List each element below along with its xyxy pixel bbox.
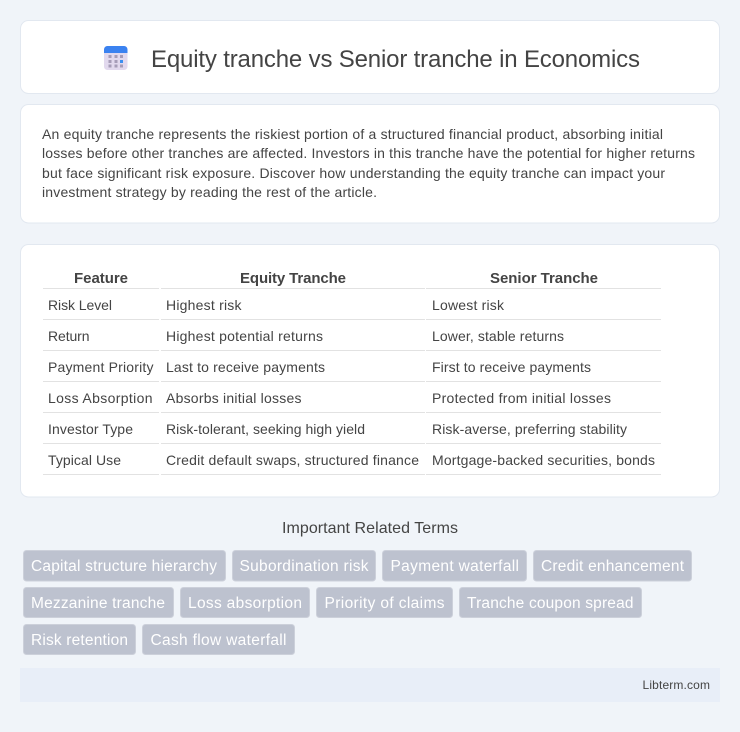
row: payment priority: First to receive payments (432, 359, 591, 375)
table header row: Feature (74, 270, 128, 287)
icon: calendar (104, 46, 128, 70)
row: return: Lower, stable returns (432, 328, 564, 344)
tag: Payment waterfall (390, 558, 519, 575)
row: return: Highest potential returns (166, 328, 323, 344)
tag (316, 588, 452, 618)
tag: Priority of claims (324, 595, 445, 612)
row: risk level: Lowest risk (432, 297, 505, 313)
intro text: losses before other tranches are affected. Investors in this tranche have the potential for higher returns (42, 145, 695, 161)
row: payment priority (43, 359, 661, 382)
tag: Mezzanine tranche (31, 595, 165, 612)
row: typical use: Mortgage-backed securities, bonds (432, 452, 655, 468)
row: typical use (43, 452, 661, 475)
tag: Risk retention (31, 632, 128, 649)
tag: Tranche coupon spread (467, 595, 634, 612)
header panel (20, 20, 720, 94)
tag (180, 588, 310, 618)
row: investor type (43, 421, 661, 444)
row: risk level: Risk Level (48, 297, 112, 313)
tag (24, 624, 136, 654)
row: investor type: Investor Type (48, 421, 133, 437)
tag: Subordination risk (240, 558, 369, 575)
panel: intro paragraph (20, 104, 720, 223)
tag (24, 588, 174, 618)
row: return: Return (48, 328, 90, 344)
row: risk level (43, 297, 661, 320)
tag: Cash flow waterfall (150, 632, 286, 649)
panel: comparison table (20, 244, 720, 497)
tag: Capital structure hierarchy (31, 558, 217, 575)
row: loss absorption: Absorbs initial losses (166, 390, 302, 406)
row: payment priority: Last to receive payments (166, 359, 325, 375)
row: loss absorption: Protected from initial losses (432, 390, 611, 406)
row: loss absorption (43, 390, 661, 413)
related terms heading: Important Related Terms (282, 520, 458, 537)
row: return (43, 328, 661, 351)
tag (24, 550, 226, 581)
row: typical use: Typical Use (48, 452, 121, 468)
related terms tags (24, 550, 692, 654)
intro text: investment strategy by reading the rest of the article. (42, 184, 377, 200)
footer credit: Libterm.com (642, 678, 710, 692)
intro text: An equity tranche represents the riskiest portion of a structured financial product, absorbing initial (42, 126, 663, 142)
tag (534, 550, 692, 581)
footer (20, 668, 720, 702)
tag: Credit enhancement (541, 558, 685, 575)
table header row: Equity Tranche (240, 270, 346, 287)
tag (460, 588, 642, 618)
row: loss absorption: Loss Absorption (48, 390, 152, 406)
row: risk level: Highest risk (166, 297, 242, 313)
table header row (43, 270, 661, 289)
intro text: but face significant risk exposure. Discover how understanding the equity tranche can impact your (42, 165, 665, 181)
title: Equity tranche vs Senior tranche in Economics (151, 46, 640, 73)
tag (142, 624, 294, 654)
intro text (42, 126, 695, 200)
row: typical use: Credit default swaps, structured finance (166, 452, 419, 468)
row: investor type: Risk-tolerant, seeking high yield (166, 421, 365, 437)
row: payment priority: Payment Priority (48, 359, 154, 375)
tag: Loss absorption (188, 595, 302, 612)
table header row: Senior Tranche (490, 270, 598, 287)
row: investor type: Risk-averse, preferring stability (432, 421, 627, 437)
tag (232, 550, 376, 581)
tag (382, 550, 526, 581)
